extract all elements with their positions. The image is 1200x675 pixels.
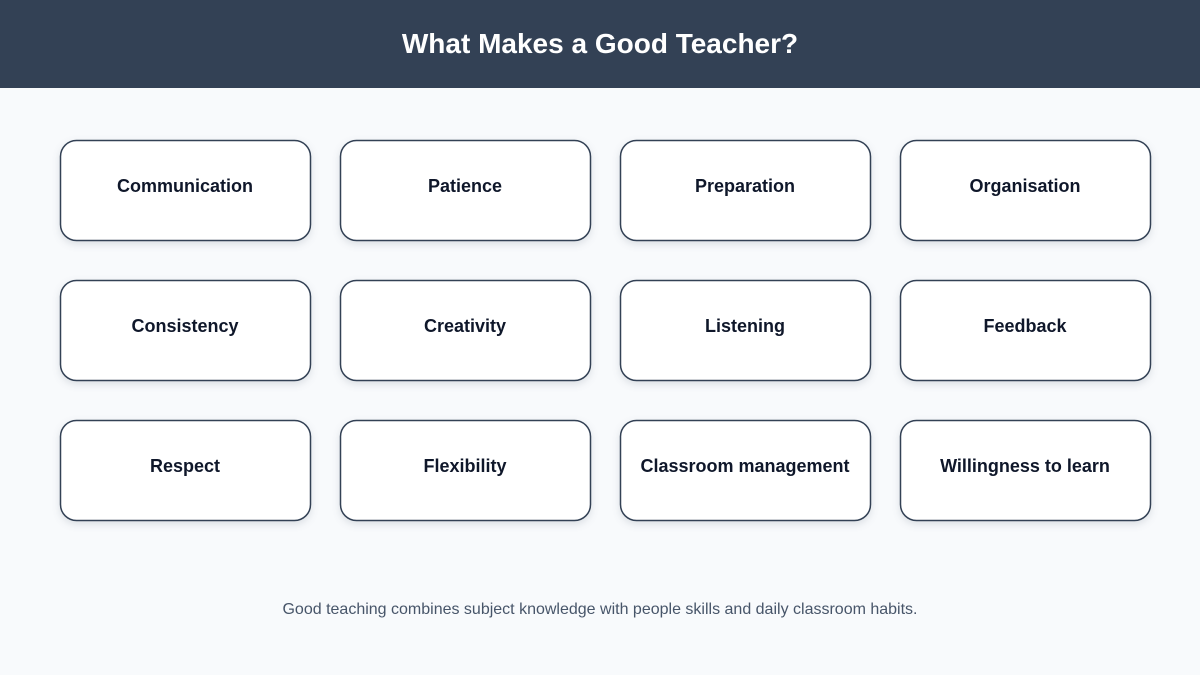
card: Consistency: Consistency: [131, 316, 239, 336]
card: Organisation: Organisation: [969, 176, 1081, 196]
card: Creativity: [340, 280, 590, 380]
card: Listening: Listening: [705, 316, 785, 336]
footer caption: Good teaching combines subject knowledge with people skills and daily classroom habits.: [282, 601, 918, 618]
card: Communication: [60, 140, 310, 240]
card: Respect: [60, 420, 310, 520]
card: Classroom management: Classroom management: [640, 456, 850, 476]
title: What Makes a Good Teacher?: [402, 28, 798, 59]
header band: [0, 0, 1200, 88]
card: Willingness to learn: [900, 420, 1150, 520]
card: Creativity: Creativity: [424, 316, 506, 336]
card: Patience: Patience: [428, 176, 502, 196]
card: Respect: Respect: [150, 456, 220, 476]
card: Organisation: [900, 140, 1150, 240]
card: Preparation: Preparation: [695, 176, 795, 196]
card: Patience: [340, 140, 590, 240]
card: Flexibility: Flexibility: [423, 456, 507, 476]
card: Flexibility: [340, 420, 590, 520]
card: Communication: Communication: [117, 176, 253, 196]
card: Listening: [620, 280, 870, 380]
card: Consistency: [60, 280, 310, 380]
card: Feedback: Feedback: [983, 316, 1068, 336]
card: Willingness to learn: Willingness to learn: [940, 456, 1110, 476]
card: Preparation: [620, 140, 870, 240]
card: Classroom management: [620, 420, 870, 520]
card: Feedback: [900, 280, 1150, 380]
